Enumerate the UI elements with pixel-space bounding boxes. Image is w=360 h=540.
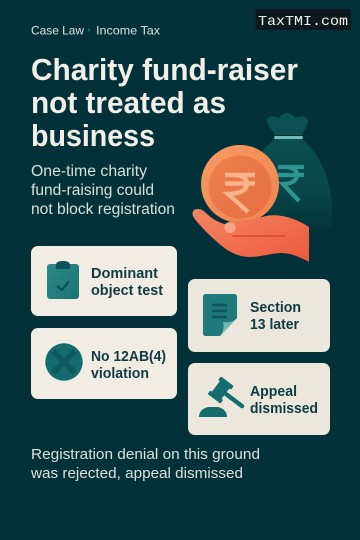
subtitle: One-time charity	[31, 163, 147, 180]
label: No 12AB(4)	[91, 349, 166, 365]
subtitle: not block registration	[31, 201, 175, 218]
title: Charity fund-raiser	[31, 52, 298, 87]
title	[31, 52, 298, 153]
icon: document	[203, 294, 237, 336]
watermark: TaxTMI.com	[256, 9, 351, 30]
icon: gavel	[199, 376, 250, 417]
label	[250, 300, 301, 333]
card: dominant object test	[31, 246, 177, 316]
label: violation	[91, 366, 149, 382]
conclusion text: Registration denial on this ground	[31, 446, 260, 463]
card: appeal dismissed	[188, 363, 330, 435]
label	[91, 349, 166, 382]
label: Section	[250, 300, 301, 316]
label	[91, 266, 163, 299]
label: Dominant	[91, 266, 158, 282]
subtitle: fund-raising could	[31, 182, 154, 199]
title: not treated as	[31, 85, 226, 120]
label: object test	[91, 283, 163, 299]
label	[250, 384, 318, 417]
category line: Case Law	[31, 24, 84, 38]
label: Appeal	[250, 384, 297, 400]
category line: Income Tax	[96, 24, 160, 38]
label: dismissed	[250, 401, 318, 417]
label: 13 later	[250, 317, 299, 333]
category line	[31, 24, 160, 38]
icon: cross in circle	[45, 343, 83, 381]
icon: clipboard	[47, 261, 79, 299]
card: section 13 later	[188, 279, 330, 352]
watermark: TaxTMI.com: TaxTMI.com	[258, 14, 348, 30]
conclusion text	[30, 446, 260, 482]
card: no 12AB(4) violation	[31, 328, 177, 399]
icon: money bag	[256, 113, 332, 228]
conclusion text: was rejected, appeal dismissed	[30, 465, 243, 482]
subtitle	[31, 163, 175, 218]
title: business	[31, 118, 155, 153]
icon: hand holding coin	[192, 145, 309, 262]
